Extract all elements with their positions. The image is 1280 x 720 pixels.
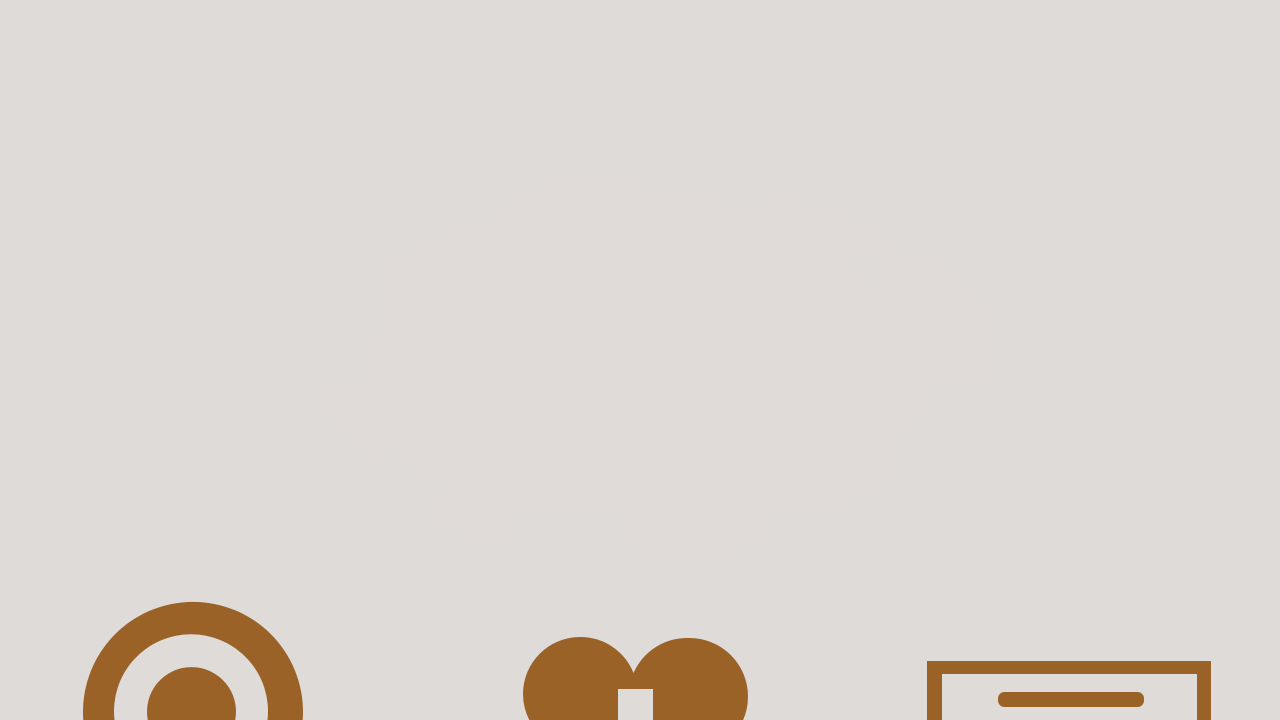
icon: concentric target	[83, 602, 303, 720]
icon: heart with keyhole	[523, 637, 748, 720]
icon: framed document	[927, 661, 1211, 720]
